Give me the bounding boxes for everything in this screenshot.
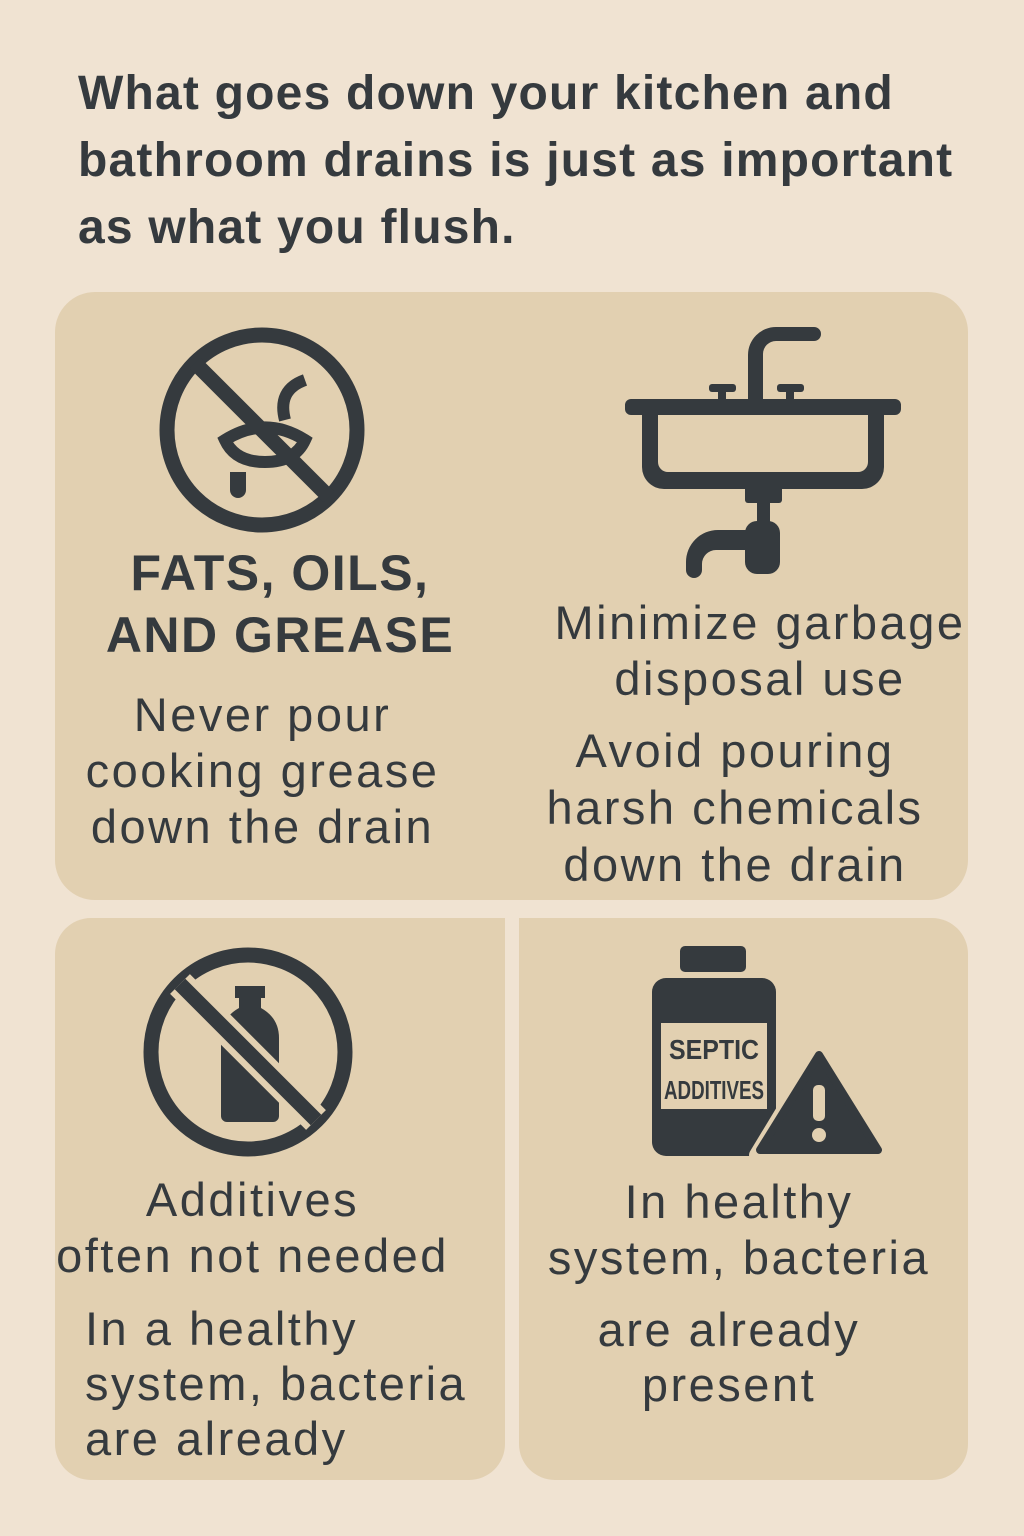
text: avoid chemicals: down the drain [563,838,907,891]
title: bathroom drains is just as important [78,134,953,187]
text: avoid chemicals: harsh chemicals [546,781,924,834]
heading: additives [56,1173,449,1282]
panel: septic [519,918,968,1480]
icon: sink [625,327,901,578]
text: already present: are already [598,1303,860,1356]
text: already present [598,1303,860,1411]
heading: in healthy [548,1175,930,1284]
text: avoid chemicals: Avoid pouring [575,724,895,777]
title [78,67,953,254]
icon: no bottle [144,948,352,1156]
text: never pour: Never pour [134,688,391,741]
heading: fats oils grease [106,545,454,663]
text: never pour: cooking grease [86,744,439,797]
heading: additives: Additives [146,1173,359,1226]
heading: in healthy: In healthy [625,1175,853,1228]
text: never pour [86,688,439,853]
icon: septic bottle with warning [652,946,882,1156]
title: as what you flush. [78,201,516,254]
text: minimize disposal: disposal use [614,652,906,705]
panel: top [55,292,968,900]
heading: additives: often not needed [56,1229,449,1282]
heading: fats oils grease: FATS, OILS, [131,545,429,601]
icon: no grease [160,328,364,532]
text: healthy system: In a healthy [85,1302,358,1355]
heading: fats oils grease: AND GREASE [106,607,454,663]
text: avoid chemicals [546,724,924,891]
heading: in healthy: system, bacteria [548,1231,930,1284]
text: minimize disposal: Minimize garbage [555,596,965,649]
icon: septic bottle with warning: ADDITIVES [664,1075,764,1105]
title: What goes down your kitchen and [78,67,894,120]
text: healthy system: system, bacteria [85,1357,467,1410]
text: already present: present [642,1358,816,1411]
text: never pour: down the drain [91,800,434,853]
panel: additives [55,918,505,1480]
icon: septic bottle with warning: SEPTIC [669,1034,759,1065]
text: healthy system [85,1302,467,1465]
text: minimize disposal [555,596,965,705]
text: healthy system: are already [85,1412,348,1465]
